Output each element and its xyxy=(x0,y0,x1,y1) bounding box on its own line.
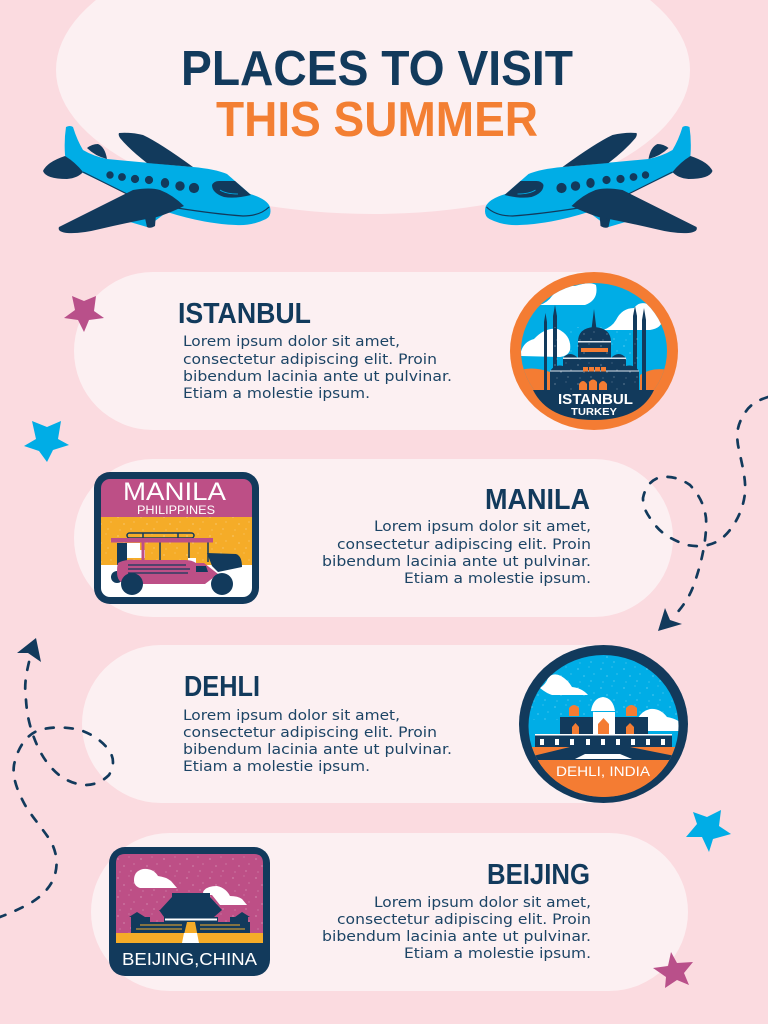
title: THIS SUMMER xyxy=(216,93,538,147)
text block: Manila description: consectetur adipiscing elit. Proin xyxy=(337,537,591,553)
text block: Beijing description: Etiam a molestie ipsum. xyxy=(404,946,591,962)
fort xyxy=(535,697,672,747)
text block: Manila description: Etiam a molestie ipsum. xyxy=(404,571,591,587)
text block: Manila description xyxy=(322,519,591,587)
text block: Beijing description: bibendum lacinia ante ut pulvinar. xyxy=(322,929,591,945)
icon: Manila badge: PHILIPPINES xyxy=(137,503,215,517)
text block: Istanbul description: consectetur adipiscing elit. Proin xyxy=(183,352,437,368)
heading: Istanbul: ISTANBUL xyxy=(178,298,311,330)
icon: Istanbul badge: ISTANBUL xyxy=(558,391,633,408)
icon: right airplane xyxy=(485,126,712,233)
icon: blue star left xyxy=(24,421,69,462)
text block: Manila description: Lorem ipsum dolor sit amet, xyxy=(374,519,591,535)
text block: Dehli description: bibendum lacinia ante ut pulvinar. xyxy=(183,742,452,758)
icon: Manila badge: MANILA xyxy=(123,478,226,506)
text block: Manila description: bibendum lacinia ante ut pulvinar. xyxy=(322,554,591,570)
icon: Istanbul badge: TURKEY xyxy=(571,406,617,418)
text block: Beijing description: consectetur adipiscing elit. Proin xyxy=(337,912,591,928)
jeepney xyxy=(111,533,242,595)
icon: Istanbul badge xyxy=(510,272,678,430)
text block: Istanbul description: bibendum lacinia ante ut pulvinar. xyxy=(183,369,452,385)
dashed flight path: right xyxy=(643,397,768,631)
icon: Manila badge xyxy=(94,472,259,604)
panel: Beijing xyxy=(91,833,688,991)
text block: Dehli description: Lorem ipsum dolor sit amet, xyxy=(183,708,400,724)
text block: Dehli description xyxy=(183,708,452,775)
icon: Dehli badge: DEHLI, INDIA xyxy=(556,764,650,779)
text block: Istanbul description: Etiam a molestie ipsum. xyxy=(183,386,370,402)
icon: left arrowhead xyxy=(17,638,41,662)
title backdrop ellipse xyxy=(56,0,690,214)
icon: Beijing badge xyxy=(109,847,270,976)
dashed flight path: left xyxy=(0,638,113,917)
panel: Manila xyxy=(74,459,673,617)
title xyxy=(181,42,573,147)
icon: blue star right xyxy=(686,810,731,852)
panel: Istanbul xyxy=(74,272,678,430)
text block: Istanbul description: Lorem ipsum dolor sit amet, xyxy=(183,334,400,350)
title: PLACES TO VISIT xyxy=(181,42,573,96)
panel: Dehli xyxy=(82,645,690,803)
text block: Beijing description: Lorem ipsum dolor sit amet, xyxy=(374,895,591,911)
icon: Beijing badge: BEIJING,CHINA xyxy=(122,949,257,969)
icon: left airplane xyxy=(43,126,270,233)
icon: pink star top xyxy=(64,296,104,332)
heading: Manila: MANILA xyxy=(485,484,590,516)
icon: pink star bottom xyxy=(653,952,693,988)
text block: Beijing description xyxy=(322,895,591,962)
mosque xyxy=(544,305,646,391)
icon: right arrowhead xyxy=(658,608,682,631)
text block: Istanbul description xyxy=(183,334,452,402)
heading: Beijing: BEIJING xyxy=(487,859,590,891)
icon: Dehli badge xyxy=(519,645,690,803)
badge banner xyxy=(533,390,654,420)
text block: Dehli description: consectetur adipiscing elit. Proin xyxy=(183,725,437,741)
text block: Dehli description: Etiam a molestie ipsum. xyxy=(183,759,370,775)
palace xyxy=(129,893,250,933)
heading: Dehli: DEHLI xyxy=(184,671,260,703)
